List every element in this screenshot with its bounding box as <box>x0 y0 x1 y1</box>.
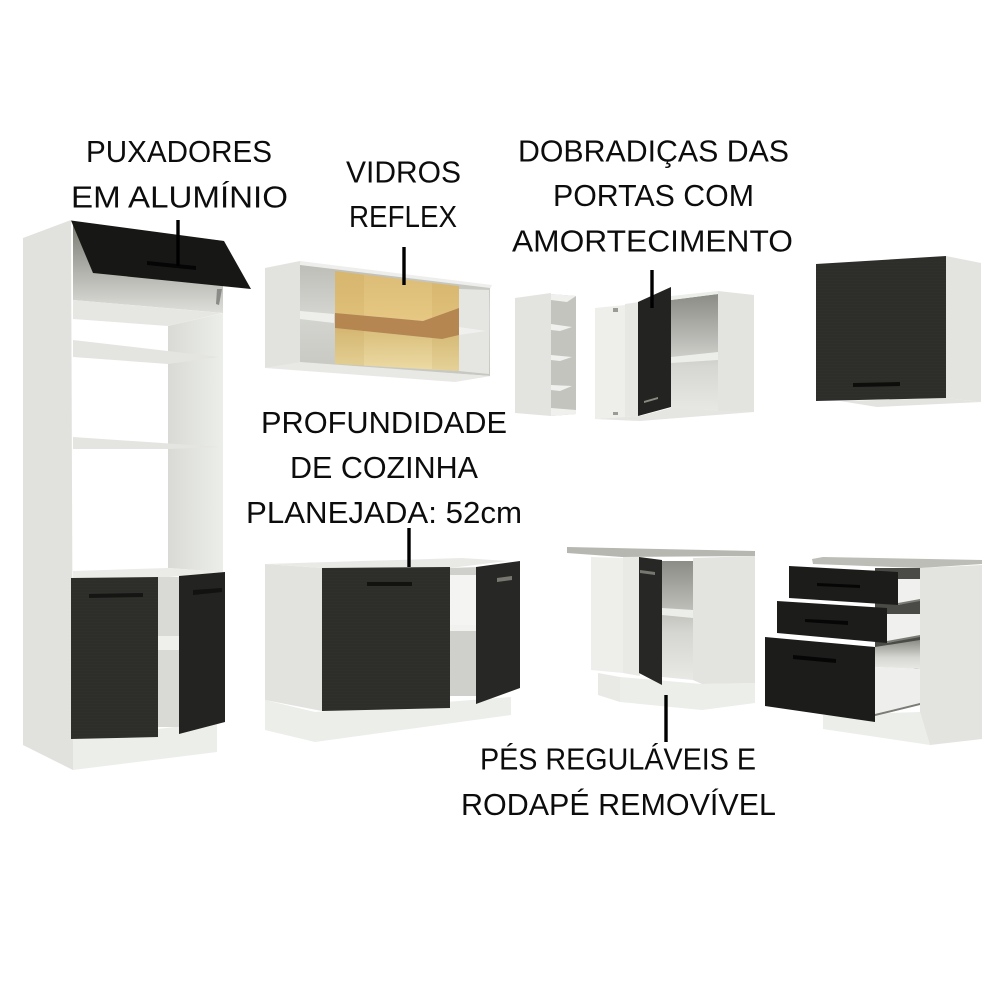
glass lower reflection <box>335 328 459 371</box>
narrow corner shelf unit <box>515 293 576 416</box>
glass right pane tint <box>432 283 459 371</box>
corner base shelf <box>662 608 693 618</box>
middle drawer box <box>887 614 920 643</box>
corner lower hinge <box>613 412 618 415</box>
glass cabinet top edge <box>300 261 492 289</box>
tower inner right panel <box>168 313 223 572</box>
glass cabinet right shelf <box>459 327 486 335</box>
label: pés reguláveis <box>461 742 776 822</box>
label: dobradiças: DOBRADIÇAS DAS <box>518 134 789 168</box>
corner shelf <box>671 352 718 363</box>
corner base left door <box>591 557 623 673</box>
corner interior <box>671 294 718 413</box>
corner wall cabinet <box>595 287 754 421</box>
label: dobradiças <box>512 134 793 258</box>
bottom drawer box <box>875 667 920 716</box>
line: hinges <box>650 270 654 308</box>
corner base countertop <box>567 547 755 557</box>
base cabinet open door <box>476 561 520 704</box>
black wall cabinet <box>816 256 981 407</box>
label: pés reguláveis: RODAPÉ REMOVÍVEL <box>461 787 776 822</box>
wall cabinet side <box>946 256 981 402</box>
label: profundidade: PROFUNDIDADE <box>261 406 507 440</box>
tower upper compartment <box>73 222 223 313</box>
shelf unit interior <box>551 294 576 416</box>
label: dobradiças: AMORTECIMENTO <box>512 224 793 258</box>
tower cabinet <box>23 220 251 770</box>
glass cabinet interior <box>300 265 490 376</box>
wide base cabinet <box>265 558 520 742</box>
tower shelf 2 <box>73 340 219 364</box>
base cabinet interior <box>450 567 478 696</box>
glass cabinet right inner panel <box>459 289 489 374</box>
label: profundidade: PLANEJADA: 52cm <box>246 496 522 530</box>
glass cabinet side <box>265 261 300 368</box>
corner top strip <box>671 291 718 300</box>
tower right door <box>179 572 225 734</box>
drawer slides <box>875 599 920 716</box>
corner base door <box>639 557 662 685</box>
line: feet <box>664 695 668 742</box>
glass cabinet left shelf <box>300 311 334 323</box>
corner base cabinet <box>567 547 755 710</box>
label: vidros: REFLEX <box>349 200 457 234</box>
corner base side <box>693 556 755 684</box>
corner base mid panel <box>623 557 640 676</box>
label: vidros: VIDROS <box>346 156 461 190</box>
corner side <box>718 291 754 412</box>
tower side panel <box>23 220 73 770</box>
label: puxadores: EM ALUMÍNIO <box>71 180 288 214</box>
wall cabinet handle <box>853 382 900 387</box>
corner base handle <box>640 570 655 575</box>
glass wall cabinet <box>265 261 492 382</box>
base cabinet shelf <box>450 625 477 631</box>
line: handles <box>176 220 180 266</box>
corner black door <box>638 287 671 416</box>
label: pés reguláveis: PÉS REGULÁVEIS E <box>480 742 756 776</box>
tower left door handle <box>89 593 143 598</box>
glass upper reflection <box>335 271 459 321</box>
label: profundidade: DE COZINHA <box>290 451 479 485</box>
base cabinet top <box>265 558 508 568</box>
reflective glass door <box>335 271 459 371</box>
glass cabinet bottom <box>265 362 491 382</box>
corner left door panel <box>595 305 625 419</box>
lower recess <box>875 640 920 669</box>
corner bottom <box>595 408 754 421</box>
tower lift flap <box>71 220 251 289</box>
base cabinet side <box>265 564 322 711</box>
line: glass <box>402 247 406 285</box>
base cabinet main door <box>322 567 450 711</box>
tower lift hinge <box>216 289 222 305</box>
bottom drawer front <box>765 637 875 722</box>
leader lines <box>178 220 666 742</box>
drawer base cabinet <box>765 557 982 745</box>
corner base interior <box>662 561 693 680</box>
middle drawer front <box>777 601 887 643</box>
drawer cabinet side <box>920 565 982 745</box>
base cabinet open door handle <box>497 576 512 582</box>
tower left door <box>71 577 158 739</box>
tower base shelf <box>73 568 226 578</box>
tower lower interior <box>158 577 182 727</box>
tower shelf 1 <box>73 300 222 326</box>
drawer cabinet plinth <box>823 712 930 745</box>
tower right door handle <box>193 588 222 595</box>
tower plinth <box>73 722 217 770</box>
corner base left plinth <box>598 673 620 702</box>
tower shelf 3 <box>73 437 220 449</box>
base cabinet main handle <box>367 582 412 586</box>
top drawer front <box>789 566 898 605</box>
line: depth <box>407 528 411 567</box>
corner base plinth <box>620 677 755 710</box>
top drawer box <box>898 579 920 605</box>
drawer cabinet dark interior <box>875 568 920 670</box>
shelf unit boards <box>551 294 576 416</box>
label: puxadores: PUXADORES <box>86 135 272 169</box>
corner door handle <box>644 397 658 403</box>
wall cabinet bottom <box>840 398 981 407</box>
drawer cabinet countertop <box>812 557 982 568</box>
glass brown band <box>335 308 459 339</box>
label: puxadores <box>71 135 288 214</box>
top drawer handle <box>817 583 860 588</box>
tower flap handle <box>147 261 196 270</box>
base cabinet upper open area <box>450 575 476 625</box>
corner upper hinge <box>613 308 618 312</box>
label: dobradiças: PORTAS COM <box>553 179 754 213</box>
shelf unit side <box>515 293 551 416</box>
corner mid panel <box>625 302 640 417</box>
tower lower shelf <box>158 636 180 650</box>
label: profundidade <box>246 406 522 530</box>
base cabinet plinth <box>265 697 511 742</box>
middle drawer handle <box>805 619 848 625</box>
glass left pane tint <box>335 271 364 366</box>
bottom drawer handle <box>793 655 836 663</box>
wall cabinet door <box>816 256 946 401</box>
label: vidros <box>346 156 461 234</box>
